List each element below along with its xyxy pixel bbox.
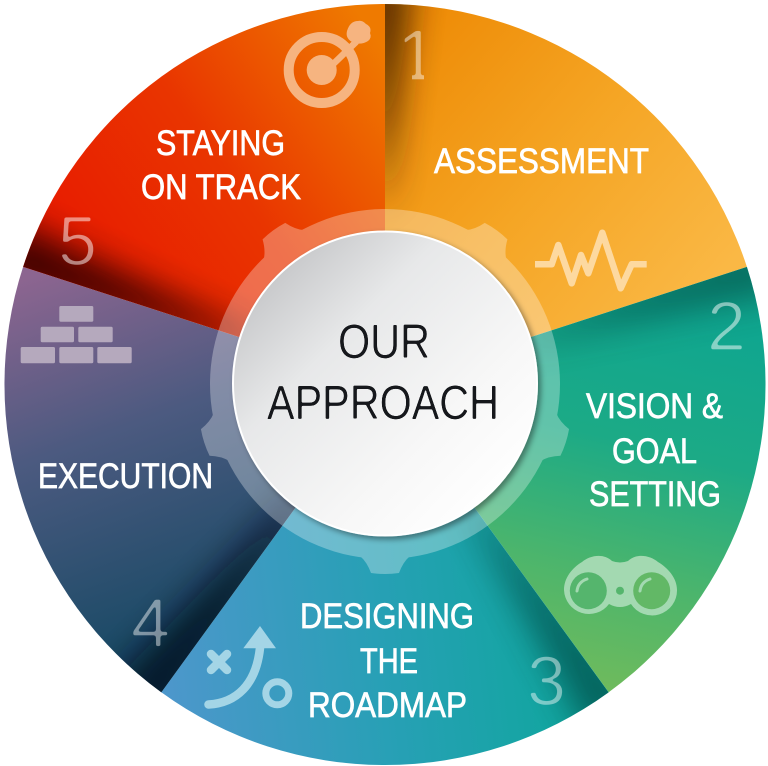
label: staying on track	[141, 124, 301, 207]
label: vision and goal setting: GOAL	[612, 432, 697, 471]
number 5: 5	[58, 202, 97, 280]
number 1: 1	[397, 16, 437, 96]
hub title	[267, 316, 499, 430]
label: vision and goal setting: SETTING	[589, 475, 721, 514]
label: execution: EXECUTION	[38, 457, 213, 496]
panel: vision and goal setting segment	[385, 267, 766, 692]
label: staying on track: STAYING	[156, 124, 285, 163]
label: vision and goal setting: VISION &	[586, 387, 723, 426]
panel: designing the roadmap segment	[161, 384, 609, 765]
icon: pulse line	[535, 233, 647, 288]
label: assessment: ASSESSMENT	[434, 142, 649, 181]
icon: dart target	[289, 21, 371, 103]
panel: staying on track segment	[23, 4, 385, 384]
panel: execution segment	[4, 267, 385, 692]
label: designing the roadmap	[300, 597, 474, 725]
label: designing the roadmap: THE	[360, 642, 418, 681]
number 2: 2	[707, 287, 746, 365]
number 3: 3	[527, 642, 566, 720]
hub disc	[233, 232, 537, 536]
label: staying on track: ON TRACK	[141, 168, 301, 207]
label: designing the roadmap: DESIGNING	[300, 597, 474, 636]
icon: binoculars	[564, 556, 677, 615]
panel: assessment segment	[385, 4, 747, 384]
hub ring with teeth	[197, 209, 573, 574]
icon: play diagram with arrow	[208, 626, 289, 705]
hub title: OUR	[338, 316, 430, 369]
label: designing the roadmap: ROADMAP	[308, 686, 467, 725]
number 4: 4	[131, 584, 170, 662]
hub title: APPROACH	[267, 377, 499, 430]
label: vision and goal setting	[586, 387, 723, 514]
icon: bricks	[21, 306, 132, 363]
